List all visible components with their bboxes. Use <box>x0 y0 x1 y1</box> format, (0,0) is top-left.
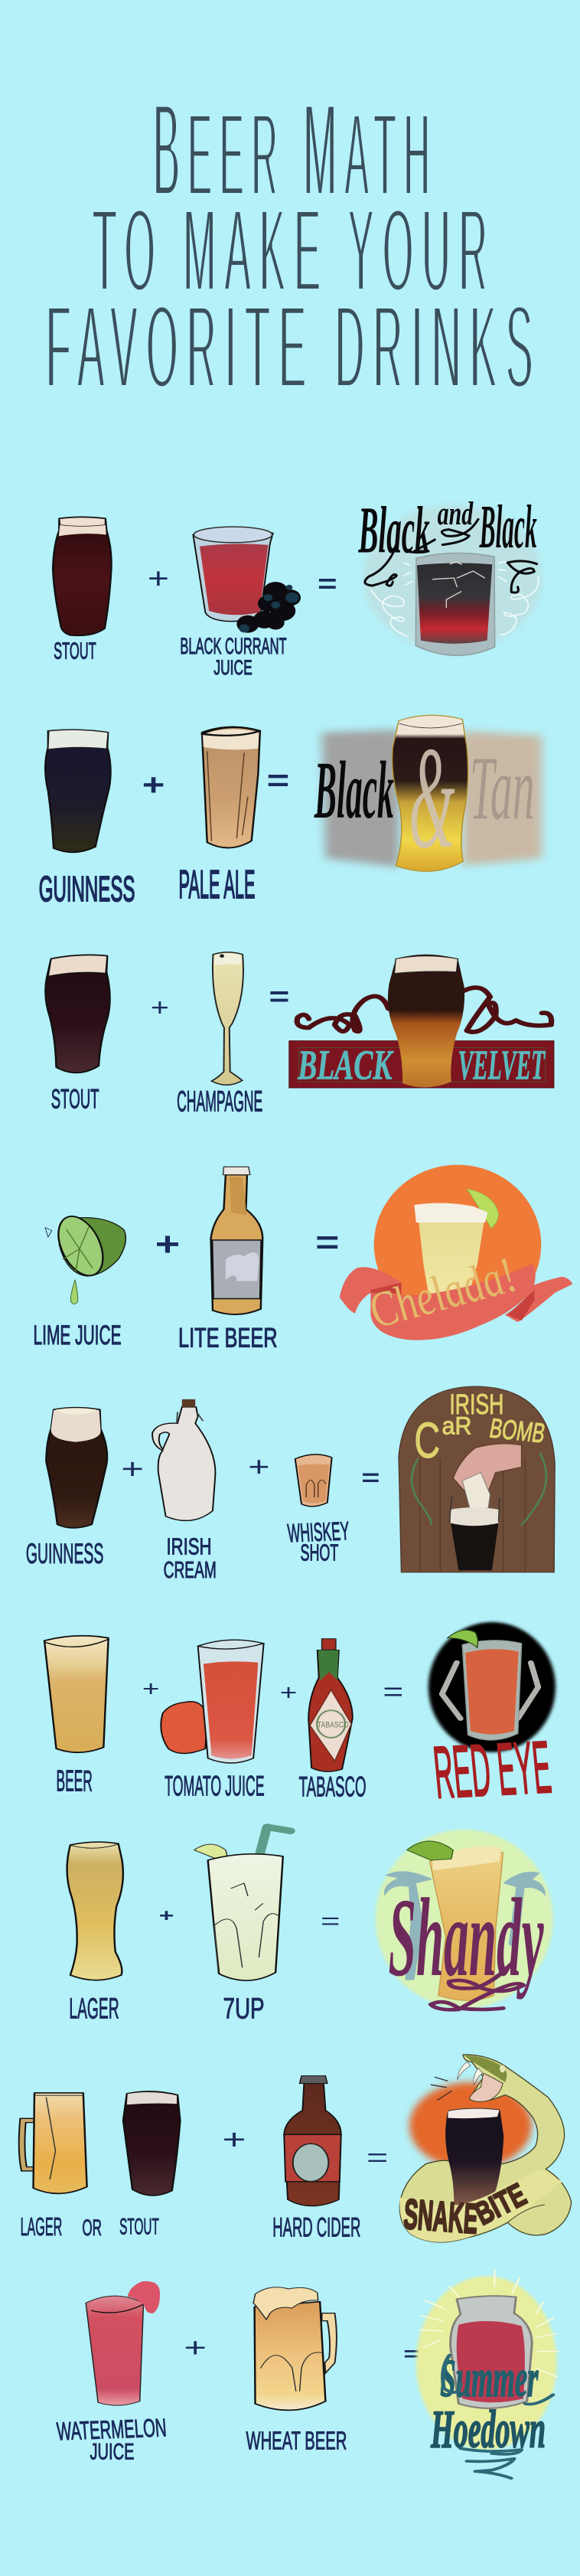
operator: plus: + <box>155 1226 180 1263</box>
result: black and black: and <box>438 495 474 532</box>
icon: black currant juice glass <box>193 527 301 633</box>
label: whiskey shot: SHOT <box>301 1539 338 1566</box>
result: black and black <box>358 494 542 655</box>
label: watermelon juice <box>56 2413 168 2464</box>
label: irish cream <box>164 1533 217 1583</box>
row: black and tan recipe <box>39 715 542 909</box>
label: watermelon juice: JUICE <box>90 2438 134 2464</box>
row: irish car bomb recipe: WHISKEY <box>286 1516 350 1548</box>
icon: hard cider bottle <box>284 2076 341 2206</box>
result: snakebite: BITE <box>469 2176 532 2232</box>
operator: plus: + <box>280 1680 297 1705</box>
row: red eye recipe <box>44 1622 556 1814</box>
operator: equals: = <box>403 2343 420 2365</box>
icon: guinness glass <box>45 730 111 852</box>
row: black velvet recipe: STOUT <box>51 1085 99 1115</box>
row: snakebite recipe <box>21 2076 388 2243</box>
result: snakebite <box>399 2055 572 2242</box>
operator: equals: = <box>367 2143 388 2172</box>
icon: stout glass <box>45 955 110 1073</box>
result: irish car bomb <box>399 1386 555 1572</box>
icon: wheat beer mug <box>253 2287 337 2410</box>
result: black and black: Black <box>358 494 430 567</box>
result: chelada <box>340 1165 572 1340</box>
operator: equals: = <box>269 981 289 1011</box>
row: shandy recipe <box>67 1827 553 2025</box>
label: whiskey shot <box>286 1516 350 1566</box>
label: lager or stout: OR <box>82 2215 102 2240</box>
operator: plus: + <box>248 1452 269 1482</box>
row: black and black recipe: BLACK CURRANT <box>180 635 287 659</box>
operator: plus: + <box>159 1906 174 1926</box>
title <box>46 77 542 413</box>
row: summer hoedown recipe: WHEAT BEER <box>246 2426 347 2455</box>
row: irish car bomb recipe: CREAM <box>164 1556 217 1583</box>
icon: lime <box>45 1212 125 1304</box>
result: irish car bomb: IRISH <box>449 1389 503 1420</box>
row: black velvet recipe: CHAMPAGNE <box>177 1086 262 1118</box>
icon: irish cream jug <box>152 1399 215 1520</box>
result: red eye <box>428 1622 556 1814</box>
result: black and tan: & <box>409 717 455 879</box>
row: shandy recipe: LAGER <box>69 1993 119 2025</box>
icon: stout glass <box>123 2091 180 2196</box>
operator: plus: + <box>184 2333 207 2362</box>
operator: equals: = <box>361 1464 380 1490</box>
operator: plus: + <box>148 563 169 595</box>
result: snakebite: SNAKE <box>402 2190 480 2242</box>
operator: equals: = <box>315 1225 339 1261</box>
row: irish car bomb recipe <box>26 1386 555 1583</box>
icon: pale ale glass <box>202 727 260 847</box>
row: chelada recipe: LIME JUICE <box>34 1321 122 1350</box>
icon: beer glass <box>44 1636 109 1752</box>
row: summer hoedown recipe <box>56 2270 559 2478</box>
result: black and tan: Black <box>314 745 394 835</box>
row: red eye recipe: BEER <box>56 1764 93 1797</box>
result: black velvet <box>289 955 554 1089</box>
result: shandy <box>376 1830 553 2010</box>
operator: plus: + <box>222 2124 246 2155</box>
row: black and tan recipe: GUINNESS <box>39 870 135 909</box>
icon: lager glass <box>67 1842 123 1980</box>
row: summer hoedown recipe: WATERMELON <box>56 2413 168 2446</box>
icon: lite beer bottle <box>211 1167 262 1314</box>
row: irish car bomb recipe: GUINNESS <box>26 1538 103 1570</box>
operator: plus: + <box>151 993 169 1021</box>
result: summer hoedown <box>416 2270 559 2478</box>
label: black currant juice: JUICE <box>213 656 253 679</box>
icon: tomato juice <box>161 1640 264 1763</box>
label: black currant juice <box>180 635 287 679</box>
result: black and tan <box>314 715 542 879</box>
icon: watermelon juice glass <box>86 2281 160 2405</box>
icon: tabasco bottle <box>308 1639 353 1771</box>
result: irish car bomb: aR <box>442 1412 471 1440</box>
icon: tabasco bottle: TABASCO <box>318 1719 349 1729</box>
result: black velvet: BLACK <box>298 1041 394 1089</box>
label: lite beer: LITE BEER <box>178 1324 278 1353</box>
row: red eye recipe: TABASCO <box>299 1771 367 1803</box>
icon: stout glass <box>53 517 112 635</box>
label: lager or stout: LAGER <box>21 2212 62 2241</box>
row: black velvet recipe <box>45 952 554 1118</box>
text: HARD CIDER <box>272 2213 360 2243</box>
row: chelada recipe <box>34 1165 572 1353</box>
operator: plus: + <box>121 1454 144 1485</box>
icon: champagne flute <box>212 952 243 1085</box>
label: irish cream: IRISH <box>167 1533 212 1559</box>
row: black and black recipe <box>53 517 337 679</box>
result: irish car bomb: C <box>414 1412 440 1468</box>
operator: equals: = <box>383 1677 403 1706</box>
icon: lager mug <box>22 2093 87 2193</box>
operator: plus: + <box>142 767 165 802</box>
operator: plus: + <box>142 1677 160 1701</box>
icon: whiskey shot <box>295 1455 332 1507</box>
label: 7up: 7UP <box>223 1993 265 2025</box>
icon: guinness glass <box>46 1408 107 1528</box>
operator: equals: = <box>267 763 289 797</box>
row: black and black recipe: STOUT <box>54 638 96 664</box>
icon: 7up glass with lime and straw <box>194 1827 290 1980</box>
row: red eye recipe: TOMATO JUICE <box>165 1771 265 1802</box>
operator: equals: = <box>318 569 337 599</box>
row: snakebite recipe: STOUT <box>119 2213 159 2239</box>
operator: equals: = <box>321 1908 340 1934</box>
row: black and tan recipe: PALE ALE <box>178 863 256 906</box>
